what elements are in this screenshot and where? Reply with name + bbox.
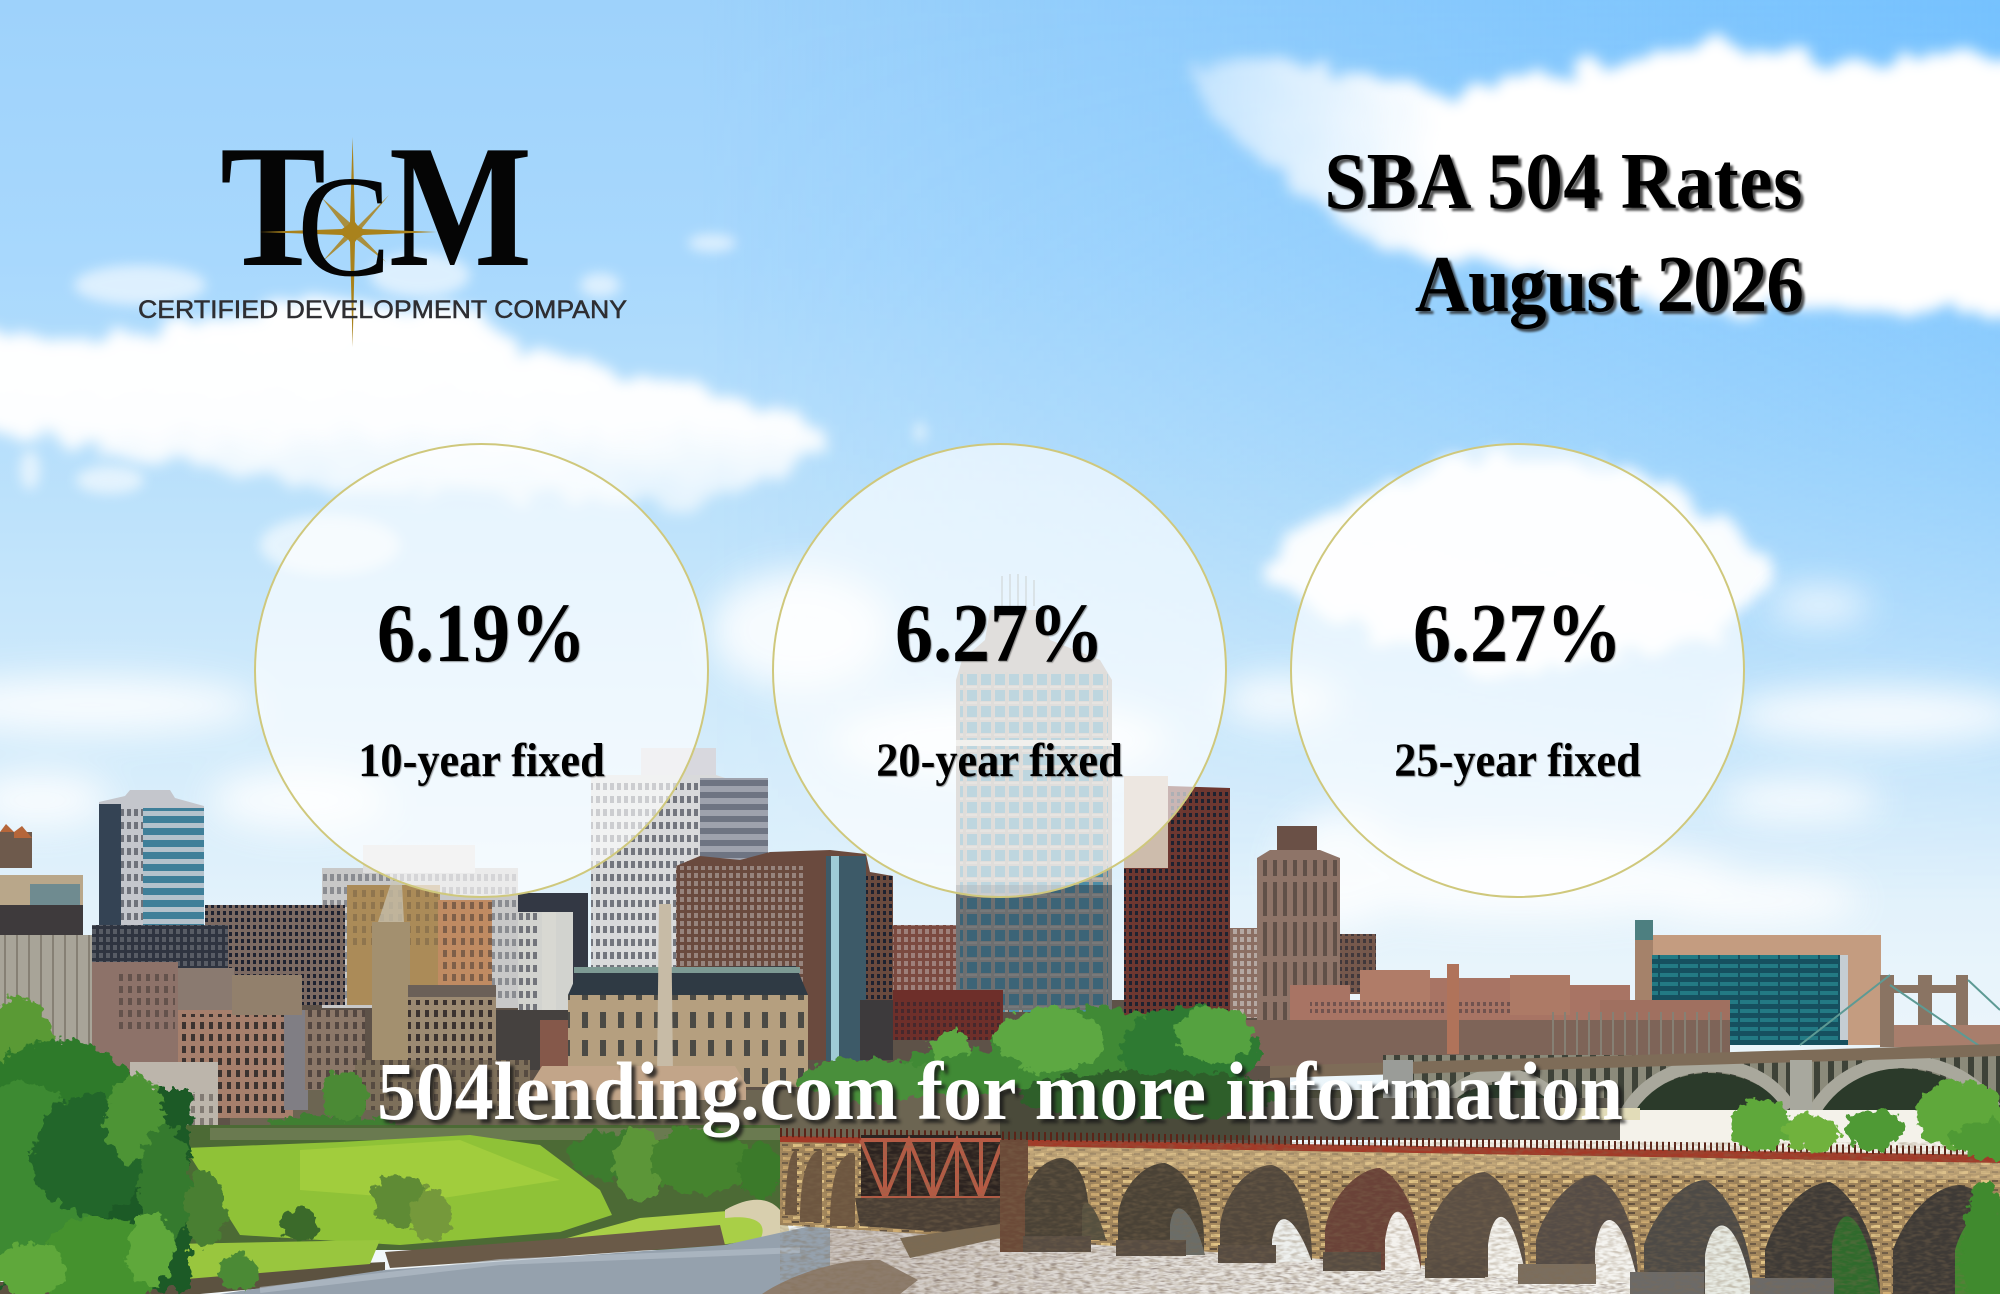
small brick block xyxy=(893,925,958,1005)
white skyscraper xyxy=(591,748,768,1003)
trees: right of river xyxy=(1730,1081,2000,1294)
dark and white striped building xyxy=(518,893,588,1011)
rock outcrop xyxy=(762,1260,918,1294)
brown slit tower xyxy=(1257,826,1340,1030)
grassy hill xyxy=(185,1135,612,1245)
rate term: 25-year fixed xyxy=(1394,734,1641,787)
water tower xyxy=(0,824,32,868)
trees: left foreground xyxy=(0,998,262,1294)
arch 6 xyxy=(1536,1175,1638,1283)
brown grid building xyxy=(205,905,345,1005)
riverfront mid-rise buildings xyxy=(0,880,1003,1142)
mid block under text xyxy=(355,1060,530,1110)
trees on the slope xyxy=(282,1126,782,1243)
logo compass star xyxy=(259,137,437,347)
foreground hillside and riverbank xyxy=(0,1125,790,1294)
third avenue bridge xyxy=(1270,1044,2000,1120)
bridge walkway rail xyxy=(780,1136,2000,1165)
arch 3 xyxy=(1220,1165,1312,1262)
opening shadows xyxy=(1445,1068,1990,1118)
arch 2 xyxy=(1118,1163,1204,1255)
rate circle: 25-year xyxy=(1290,443,1745,898)
red steel truss span xyxy=(861,1135,1001,1200)
suspension bridge towers xyxy=(1800,975,2000,1060)
rate circle: 10-year xyxy=(254,443,709,898)
stone deck with spandrels xyxy=(780,1142,2000,1294)
central high-rise xyxy=(956,574,1112,1012)
grey annex xyxy=(232,975,365,1110)
dark warehouse xyxy=(496,1010,570,1070)
river left xyxy=(220,1225,870,1294)
river walls xyxy=(385,1225,725,1268)
chimney xyxy=(657,904,673,1075)
dark brick high-rise xyxy=(1124,776,1230,1030)
arch 7 xyxy=(1644,1180,1753,1294)
rate term: 20-year fixed xyxy=(876,734,1123,787)
logo: TCM Certified Development Company xyxy=(138,130,627,346)
stone mill tower xyxy=(372,880,410,1062)
red brick low rise xyxy=(860,990,1003,1060)
government brick complex xyxy=(1230,964,1730,1066)
grain silos xyxy=(0,905,92,1085)
brick tower xyxy=(438,900,492,1030)
brick loft xyxy=(92,962,178,1072)
side blocks xyxy=(1230,928,1376,1018)
arch 8 xyxy=(1765,1182,1880,1294)
stone arch bridge xyxy=(762,1128,2000,1294)
arch 4 xyxy=(1325,1168,1421,1270)
arch 9 xyxy=(1893,1185,2000,1294)
rate value: 6.27% xyxy=(1413,587,1622,680)
city ground fill behind the riverfront xyxy=(0,1000,1400,1150)
dark low building xyxy=(92,925,228,1000)
rate circle: 20-year xyxy=(772,443,1227,898)
left arches xyxy=(785,1150,855,1226)
title: SBA 504 Rates: SBA 504 Rates xyxy=(1324,137,1803,226)
white office block behind first circle xyxy=(322,845,518,1008)
water beneath bridge xyxy=(830,1215,2000,1294)
cloud: small wisps xyxy=(20,234,926,575)
logo tagline: CERTIFIED DEVELOPMENT COMPANY xyxy=(138,296,627,324)
logo letter C: C xyxy=(297,147,391,307)
low tan roof building xyxy=(530,1066,746,1100)
cloud: behind third circle xyxy=(1265,455,1780,680)
arch 1 xyxy=(1025,1158,1089,1250)
far skyline buildings xyxy=(0,574,2000,1066)
mansard building xyxy=(568,966,808,1087)
rate value: 6.19% xyxy=(377,587,586,680)
cloud: large upper right xyxy=(1200,40,2000,322)
clouds xyxy=(0,40,2000,930)
left lawn xyxy=(120,1240,380,1282)
cloud: large left xyxy=(0,296,823,506)
tan tower xyxy=(347,885,440,1005)
arch 5 xyxy=(1427,1172,1526,1277)
blue residential tower xyxy=(99,790,204,928)
trees: city centre xyxy=(265,1006,1280,1135)
mill block xyxy=(408,985,496,1095)
brown apartment tower xyxy=(676,850,893,1061)
cloud: mid band xyxy=(0,570,2000,930)
title: August 2026: August 2026 xyxy=(1415,240,1803,329)
white ruin wall xyxy=(130,1062,218,1142)
glass office building xyxy=(1635,920,1881,1045)
red loft xyxy=(178,968,293,1118)
rate term: 10-year fixed xyxy=(358,734,605,787)
piers below truss xyxy=(855,1198,1000,1236)
small tan building xyxy=(0,875,83,935)
riverside path and lawn xyxy=(560,1205,790,1255)
pier footings xyxy=(1023,1236,1834,1294)
river upstream of arch bridge xyxy=(1250,1098,2000,1160)
call to action: 504lending.com for more information xyxy=(377,1045,1623,1137)
rate value: 6.27% xyxy=(895,587,1104,680)
